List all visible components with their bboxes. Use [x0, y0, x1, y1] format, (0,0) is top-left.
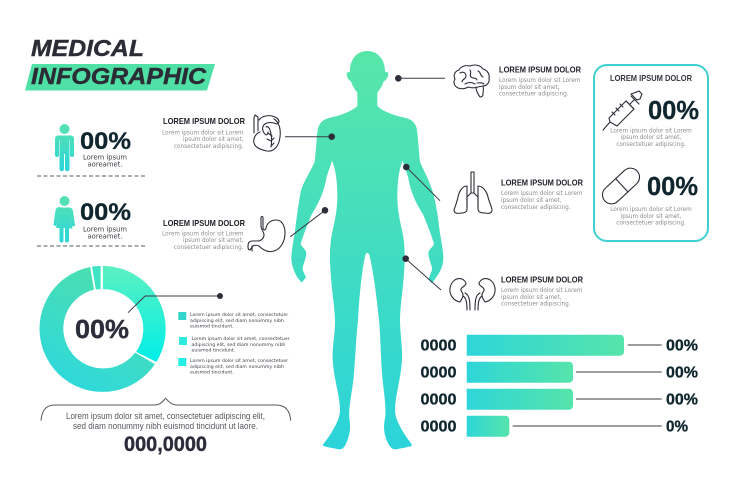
- icon: brain: [454, 65, 489, 97]
- male stat: [55, 124, 131, 171]
- pill description: Lorem ipsum dolor sit Lorem: [610, 207, 692, 213]
- syringe description: ipsum dolor sit amet,: [621, 135, 681, 141]
- bar row 1: [420, 335, 698, 356]
- brace: [41, 398, 291, 421]
- total value: 000,0000: [124, 433, 207, 456]
- heart heading: LOREM IPSUM DOLOR: [163, 116, 245, 126]
- icon: pill: [599, 164, 643, 208]
- lungs heading: LOREM IPSUM DOLOR: [501, 178, 583, 188]
- bar row 2: 0000: [420, 364, 457, 382]
- syringe description: consectetuer adipiscing.: [616, 142, 686, 148]
- title line: medical: MEDICAL: [31, 35, 144, 61]
- connector: brain: [395, 75, 445, 82]
- icon: kidneys: [450, 279, 495, 310]
- segment: small: [92, 266, 101, 290]
- stomach heading: LOREM IPSUM DOLOR: [163, 218, 245, 228]
- pill percentage: 00%: [647, 171, 698, 201]
- heart description: ipsum dolor sit amet,: [183, 137, 244, 143]
- brain heading: LOREM IPSUM DOLOR: [499, 64, 581, 74]
- body silhouette: [291, 51, 443, 449]
- legend item 2: euismod tincidunt.: [192, 348, 235, 354]
- pill description: ipsum dolor sit amet,: [621, 214, 681, 220]
- stomach text block: [162, 218, 245, 251]
- icon: female figure: [53, 196, 75, 242]
- male caption: Lorem ipsum: [83, 154, 127, 162]
- bar row 4: [420, 416, 688, 437]
- panel heading: LOREM IPSUM DOLOR: [610, 73, 692, 83]
- male percentage: 00%: [80, 128, 131, 155]
- legend item 1: [178, 312, 288, 330]
- kidneys description: Lorem ipsum dolor sit Lorem: [501, 288, 583, 294]
- syringe description: Lorem ipsum dolor sit Lorem: [610, 128, 692, 134]
- stomach description: ipsum dolor sit amet,: [183, 238, 244, 244]
- donut description: Lorem ipsum dolor sit amet, consectetuer adipiscing elit,: [66, 411, 265, 421]
- bar row 4: 0%: [666, 418, 688, 436]
- legend item 2: Lorem ipsum dolor sit amet, consectetuer: [192, 336, 290, 342]
- female caption: Lorem ipsum: [83, 226, 127, 234]
- bar row 1: 00%: [666, 338, 698, 354]
- bar row 3: [420, 389, 698, 410]
- title band: [25, 64, 215, 90]
- female percentage: 00%: [80, 199, 131, 226]
- donut callout: [128, 293, 223, 313]
- pill description: consectetuer adipiscing.: [616, 220, 686, 226]
- stomach description: Lorem ipsum dolor sit Lorem: [162, 232, 244, 238]
- title: [25, 35, 215, 90]
- icon: stomach: [248, 216, 285, 252]
- bar row 4: 0000: [420, 418, 457, 436]
- male caption: aoreamet.: [88, 160, 122, 168]
- legend item 3: adipiscing elit, sed diam nonummy nibh: [190, 364, 284, 370]
- lungs text block: [501, 178, 583, 211]
- lungs description: consectetuer adipiscing.: [501, 205, 571, 211]
- icon: lungs: [454, 172, 492, 213]
- lungs description: Lorem ipsum dolor sit Lorem: [501, 191, 583, 197]
- connector: heart: [285, 133, 335, 140]
- kidneys text block: [501, 274, 583, 308]
- legend item 2: [179, 336, 290, 354]
- donut legend: [178, 312, 290, 376]
- icon: syringe: [603, 91, 642, 130]
- panel border: [594, 65, 708, 241]
- bar row 2: 00%: [666, 364, 698, 382]
- segment: large: [39, 266, 156, 392]
- heart description: consectetuer adipiscing.: [174, 144, 244, 150]
- legend item 1: adipiscing elit, sed diam nonummy nibh: [190, 318, 284, 324]
- female stat: [53, 196, 131, 242]
- kidneys heading: LOREM IPSUM DOLOR: [501, 274, 583, 284]
- brain text block: [499, 64, 581, 98]
- bar row 1: 0000: [420, 338, 457, 354]
- icon: heart: [254, 115, 280, 151]
- bar row 3: 0000: [420, 392, 457, 408]
- segment: right: [102, 265, 166, 362]
- female caption: aoreamet.: [88, 232, 122, 240]
- donut value: 00%: [75, 314, 129, 344]
- brain description: consectetuer adipiscing.: [499, 92, 569, 98]
- syringe percentage: 00%: [648, 95, 699, 125]
- brain description: Lorem ipsum dolor sit Lorem: [499, 78, 581, 84]
- legend item 2: adipiscing elit, sed diam nonummy nibh: [192, 342, 285, 348]
- lungs description: ipsum dolor sit amet,: [501, 198, 562, 204]
- kidneys description: ipsum dolor sit amet,: [501, 295, 562, 301]
- legend item 1: Lorem ipsum dolor sit amet, consectetuer: [190, 312, 288, 318]
- heart description: Lorem ipsum dolor sit Lorem: [162, 130, 244, 136]
- stomach description: consectetuer adipiscing.: [174, 245, 244, 251]
- donut description: sed diam nonummy nibh euismod tincidunt ut laore.: [73, 421, 258, 431]
- kidneys description: consectetuer adipiscing.: [501, 302, 571, 308]
- legend item 3: Lorem ipsum dolor sit amet, consectetuer: [190, 358, 288, 364]
- heart text block: [162, 116, 245, 150]
- title line: infographic: INFOGRAPHIC: [31, 63, 206, 89]
- donut chart: [39, 265, 166, 392]
- legend item 3: [178, 358, 288, 376]
- bar row 3: 00%: [666, 392, 698, 408]
- connector: stomach: [290, 207, 328, 237]
- brain description: ipsum dolor sit amet,: [499, 85, 560, 91]
- legend item 1: euismod tincidunt.: [190, 324, 234, 330]
- bar row 2: [420, 362, 698, 383]
- legend item 3: euismod tincidunt.: [190, 370, 234, 376]
- connector: kidneys: [402, 255, 441, 290]
- icon: male figure: [55, 124, 74, 171]
- panel: medication: [594, 65, 708, 241]
- connector: lungs: [403, 164, 440, 201]
- bar chart: [420, 335, 698, 437]
